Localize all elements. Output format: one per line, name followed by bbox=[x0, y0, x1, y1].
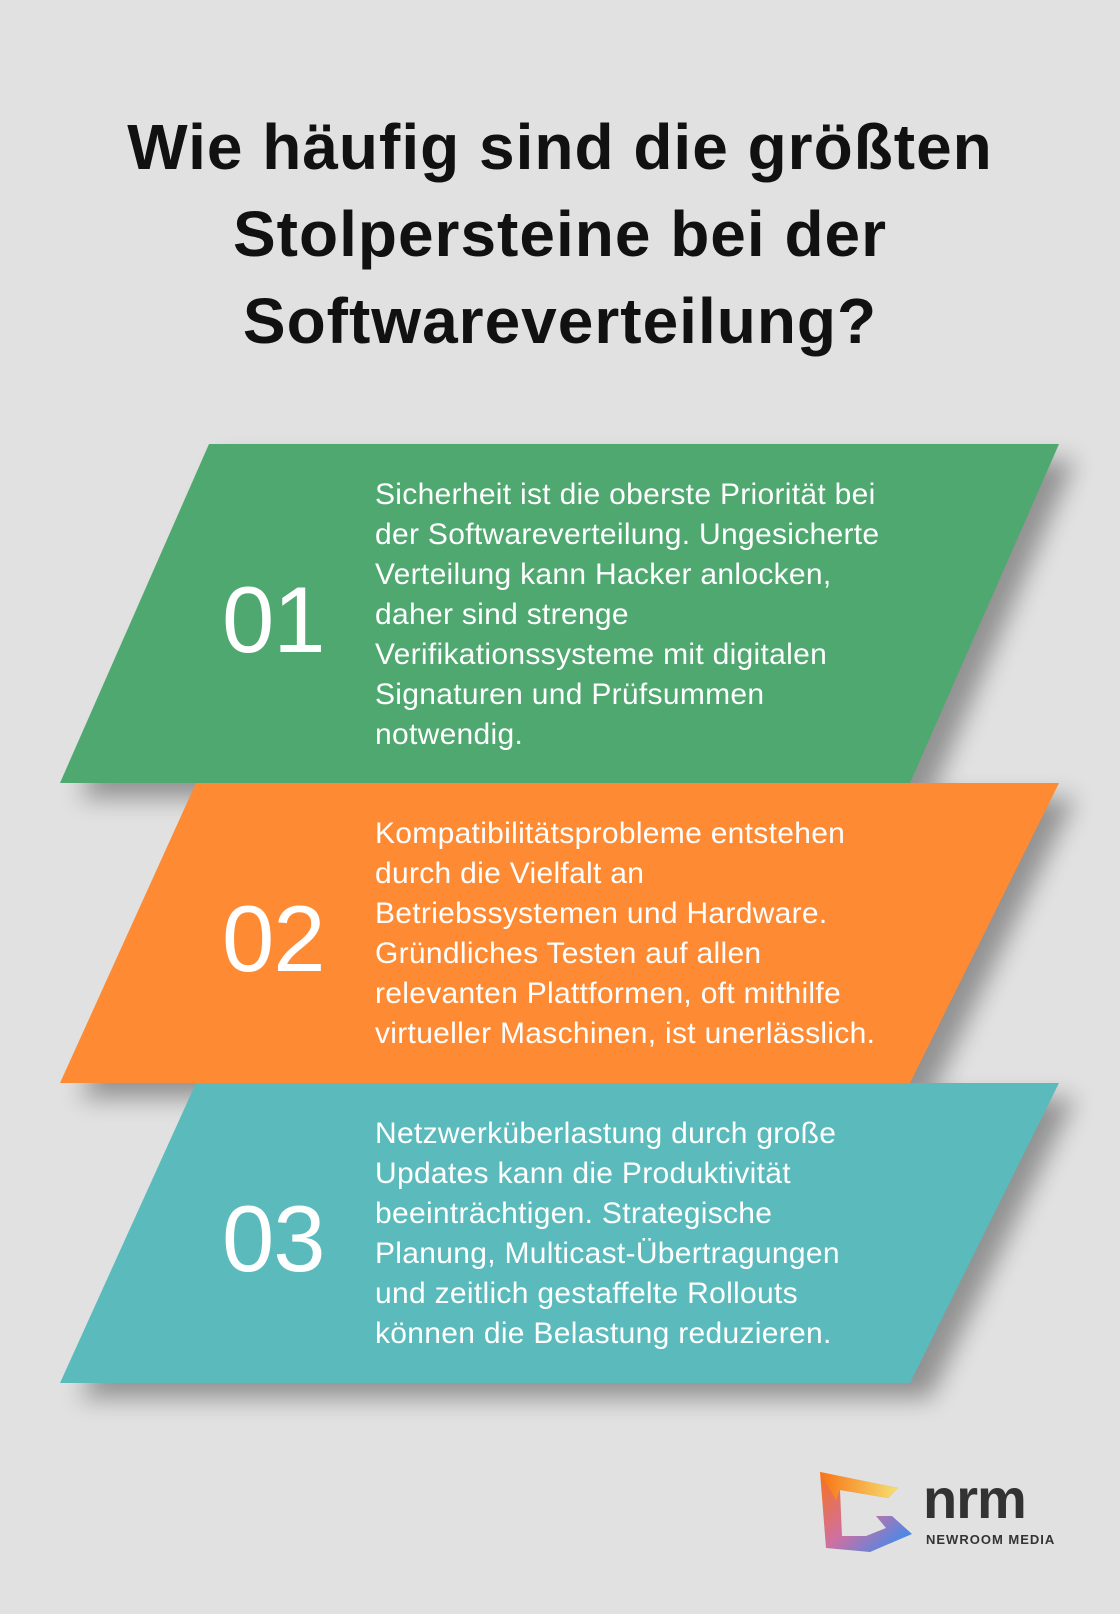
logo: NEWROOM MEDIA bbox=[926, 1532, 1055, 1547]
panel 1 bbox=[222, 478, 879, 751]
text 2: durch die Vielfalt an bbox=[375, 857, 644, 890]
number 02: 02 bbox=[222, 886, 325, 991]
text 3: können die Belastung reduzieren. bbox=[375, 1317, 832, 1350]
text 3: Netzwerküberlastung durch große bbox=[375, 1117, 836, 1150]
number 03: 03 bbox=[222, 1186, 325, 1291]
text 2: virtueller Maschinen, ist unerlässlich. bbox=[375, 1017, 875, 1050]
text 3: beeinträchtigen. Strategische bbox=[375, 1197, 772, 1230]
text 1: Signaturen und Prüfsummen bbox=[375, 678, 764, 711]
text 2: Betriebssystemen und Hardware. bbox=[375, 897, 828, 930]
text 2: Gründliches Testen auf allen bbox=[375, 937, 761, 970]
logo bbox=[820, 1467, 1055, 1552]
text 1: notwendig. bbox=[375, 718, 523, 751]
text 1: Verteilung kann Hacker anlocken, bbox=[375, 558, 832, 591]
number 01: 01 bbox=[222, 567, 325, 672]
text 1 bbox=[375, 478, 879, 751]
text 3: Planung, Multicast-Übertragungen bbox=[375, 1237, 840, 1270]
text 1: daher sind strenge bbox=[375, 598, 629, 631]
title bbox=[127, 111, 993, 357]
text 3: Updates kann die Produktivität bbox=[375, 1157, 791, 1190]
text 2: relevanten Plattformen, oft mithilfe bbox=[375, 977, 841, 1010]
title: Stolpersteine bei der bbox=[233, 198, 887, 270]
title: Wie häufig sind die größten bbox=[127, 111, 993, 183]
title: Softwareverteilung? bbox=[243, 285, 877, 357]
text 2 bbox=[375, 817, 875, 1050]
text 1: Verifikationssysteme mit digitalen bbox=[375, 638, 827, 671]
text 1: der Softwareverteilung. Ungesicherte bbox=[375, 518, 879, 551]
panel 2 bbox=[222, 817, 875, 1050]
text 3 bbox=[375, 1117, 840, 1350]
logo text: nrm bbox=[923, 1467, 1026, 1530]
icon: nrm logo mark bbox=[820, 1472, 912, 1552]
text 3: und zeitlich gestaffelte Rollouts bbox=[375, 1277, 798, 1310]
panel 3 bbox=[222, 1117, 840, 1350]
text 2: Kompatibilitätsprobleme entstehen bbox=[375, 817, 845, 850]
panel 1 shape bbox=[60, 444, 1059, 783]
text 1: Sicherheit ist die oberste Priorität bei bbox=[375, 478, 876, 511]
panel 2 shape bbox=[60, 783, 1059, 1083]
panel 3 shape bbox=[60, 1083, 1059, 1383]
